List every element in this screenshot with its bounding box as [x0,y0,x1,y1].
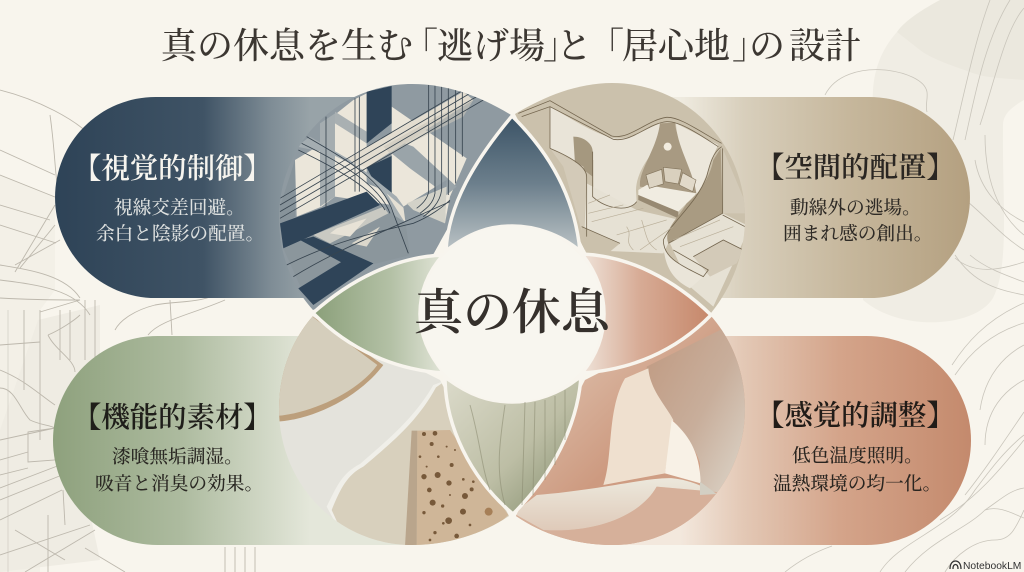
title: 」 [732,26,768,66]
title: 」 [543,26,579,66]
title: 「 [588,26,624,66]
background: contour lines and soft shapes, right [785,0,1024,572]
panel: 感覚的調整 [612,336,971,545]
panel: 空間的配置 [604,97,970,298]
title: と [556,26,592,66]
description: 動線外の逃場。 [790,198,921,219]
description: 囲まれ感の創出。 [783,224,932,245]
title: 真の休息を生む [161,26,413,66]
heading: 【視覚的制御】 [73,153,272,185]
title: 逃げ場 [437,26,545,66]
image: warm light and soft drapery [516,316,745,545]
description [773,446,941,495]
description: 温熱環境の均一化。 [773,474,941,495]
description: 漆喰無垢調湿。 [112,447,243,468]
description: 吸音と消臭の効果。 [95,474,263,495]
petal: sage green, left [313,255,444,373]
title [161,26,861,66]
icon: NotebookLM mark [950,561,961,569]
petal: terracotta, right [582,254,711,373]
image: architecture light and shadow [279,84,511,310]
pill: navy [55,97,420,298]
heading: 【感覚的調整】 [756,400,955,432]
description: 低色温度照明。 [792,446,923,467]
title: 「 [402,26,438,66]
heading: 【機能的素材】 [73,402,272,434]
description: 余白と陰影の配置。 [96,224,264,245]
title: の [749,26,785,66]
pill: terracotta [612,336,971,545]
pill: sand [604,97,970,298]
credit: NotebookLM: NotebookLM [963,561,1021,572]
petal: slate blue, top [446,116,580,251]
title: 居心地 [622,26,730,66]
central label: 真の休息 [414,285,613,340]
description [783,198,932,245]
image: secluded alcove interior [515,83,745,313]
title: 設計 [789,26,861,66]
description [96,197,264,245]
panel: 視覚的制御 [55,97,420,298]
background: architectural line drawing, left [0,90,255,572]
central circle [421,226,603,402]
image: plaster, wood and porous materials [279,316,509,545]
panel: 機能的素材 [53,336,412,545]
petal: wood grain, bottom [445,376,581,514]
description: 視線交差回避。 [114,197,245,219]
heading: 【空間的配置】 [756,152,955,184]
description [95,447,263,495]
pill: sage [53,336,412,545]
